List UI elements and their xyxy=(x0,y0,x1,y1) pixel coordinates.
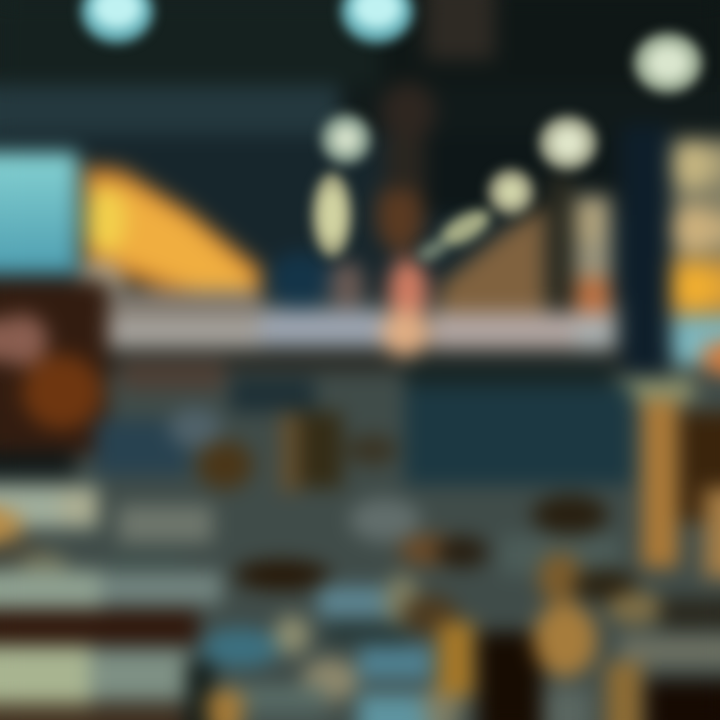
band: bright counter strip xyxy=(105,290,615,350)
lights: ceiling lamps xyxy=(81,0,702,267)
pillar: dark blue xyxy=(622,125,668,375)
area: left brown seating xyxy=(0,280,225,476)
panel: right coloured windows xyxy=(670,138,720,374)
panel: cyan screen xyxy=(0,152,78,274)
floor: mid section xyxy=(95,360,633,575)
building: warm facade xyxy=(440,175,611,320)
sign: glowing orange xyxy=(78,165,262,305)
accent: orange-pink column xyxy=(381,258,429,357)
rows: centre tables xyxy=(200,560,462,720)
rows: left tables xyxy=(0,486,222,720)
area: right orange-brown seating xyxy=(618,378,720,578)
ceiling: warm brown smudges xyxy=(268,0,495,309)
rows: right warm tables xyxy=(398,534,720,720)
